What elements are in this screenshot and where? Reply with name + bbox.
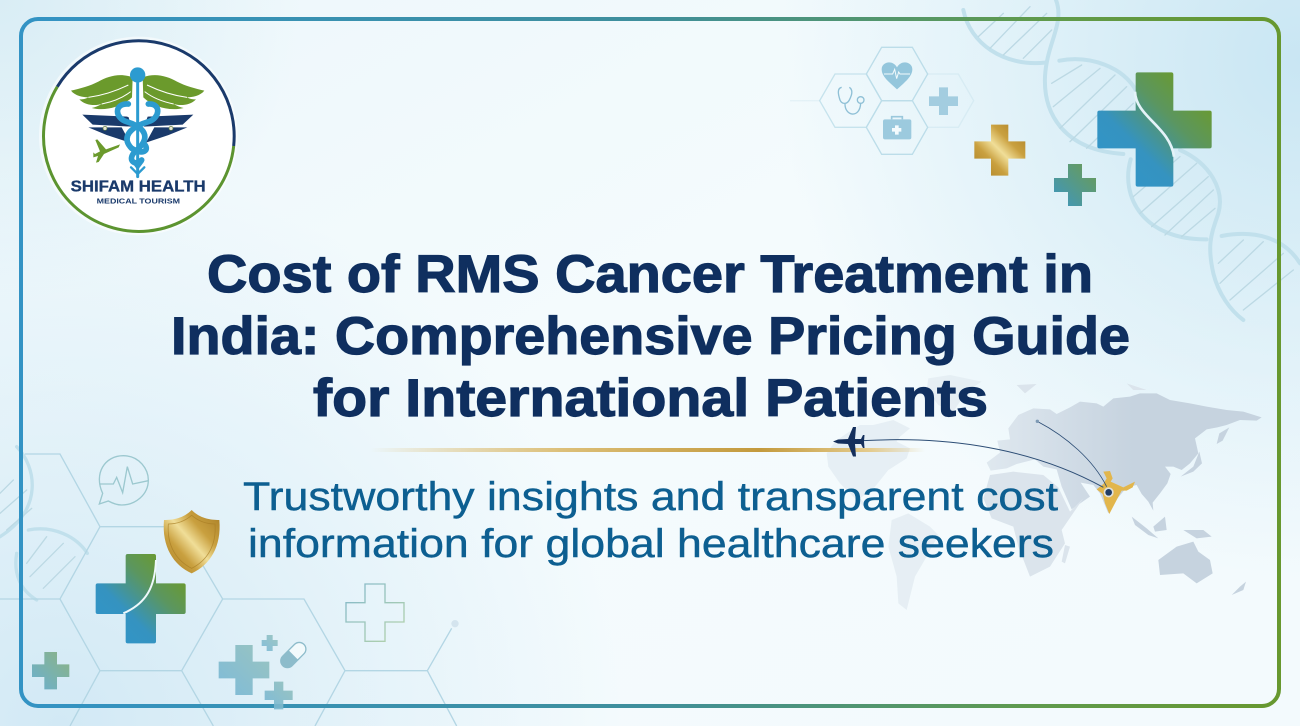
icon: stethoscope [838,87,864,114]
subtitle: Trustworthy insights and transparent cost [243,475,1058,519]
icon: split cross [96,554,186,643]
logo plane [93,139,120,163]
logo wings: green [71,75,204,109]
icon: large split cross [1097,72,1212,187]
India highlight [1097,471,1135,514]
continents: Eurasia, Africa, Australia [983,383,1262,595]
icon: small corner cross [32,652,69,689]
hexagon grid: bottom left [0,454,459,726]
flight routes [863,421,1107,487]
title: India: Comprehensive Pricing Guide [171,307,1130,366]
icon: gold shield [164,510,220,573]
medical hexagon icons [790,47,1212,206]
icon: pale crosses and pill [219,635,309,709]
logo wings: navy [82,115,193,143]
DNA helix: bottom left [0,447,87,600]
icon: plus [929,87,958,115]
title [171,245,1130,428]
title: Cost of RMS Cancer Treatment in [207,245,1093,304]
icon: gold cross [974,125,1025,176]
subtitle: information for global healthcare seekers [248,522,1054,566]
logo tagline: MEDICAL TOURISM [97,196,180,205]
icon: medical kit [883,117,911,139]
icon: outline cross [346,584,404,641]
lower left medical icons [32,456,404,709]
location pin [1036,420,1114,497]
icon: heart [882,62,912,89]
logo caduceus [117,67,158,177]
icon: small gradient cross [1054,164,1096,206]
logo [39,37,238,235]
subtitle [243,475,1058,566]
title: for International Patients [313,369,988,428]
icon: speech bubble with pulse [99,456,148,505]
icon: airplane [833,427,864,456]
logo name: SHIFAM HEALTH [71,179,206,196]
gold divider [370,448,925,452]
DNA helix: top right [963,0,1300,320]
logo ring [44,41,234,231]
world map [827,375,1262,610]
